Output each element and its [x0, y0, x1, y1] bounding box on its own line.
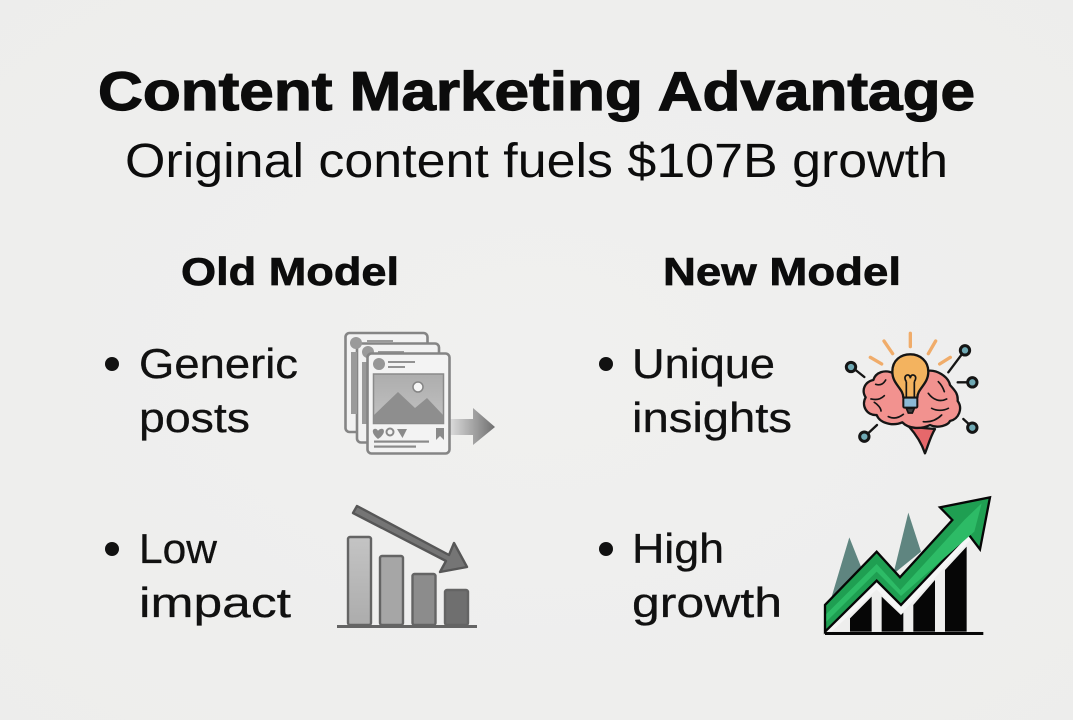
- bullet: unique insights: [599, 340, 792, 441]
- bullet: unique insights: Unique: [632, 340, 775, 387]
- bullet: generic posts: Generic: [139, 340, 298, 387]
- title: Content Marketing Advantage: [98, 60, 975, 122]
- bullet: low impact: impact: [139, 579, 291, 626]
- bullet: low impact: [105, 525, 291, 626]
- panel: new model: [599, 251, 990, 635]
- bullet: generic posts: posts: [139, 394, 250, 441]
- heading: old model: Old Model: [181, 251, 399, 294]
- bullet: high growth: High: [632, 525, 724, 572]
- panel: old model: [105, 251, 495, 628]
- icon: stacked generic post cards with arrow: [346, 333, 495, 454]
- subtitle: Original content fuels $107B growth: [125, 135, 948, 188]
- bullet: unique insights: insights: [632, 394, 792, 441]
- bullet: high growth: [599, 525, 782, 626]
- heading: new model: New Model: [663, 251, 901, 294]
- icon: declining bar chart with arrow: [337, 506, 477, 628]
- icon: brain with lightbulb: [846, 333, 977, 453]
- bullet: generic posts: [105, 340, 298, 441]
- bullet: low impact: Low: [139, 525, 218, 572]
- icon: rising growth arrow over bars: [825, 497, 990, 635]
- bullet: high growth: growth: [632, 579, 782, 626]
